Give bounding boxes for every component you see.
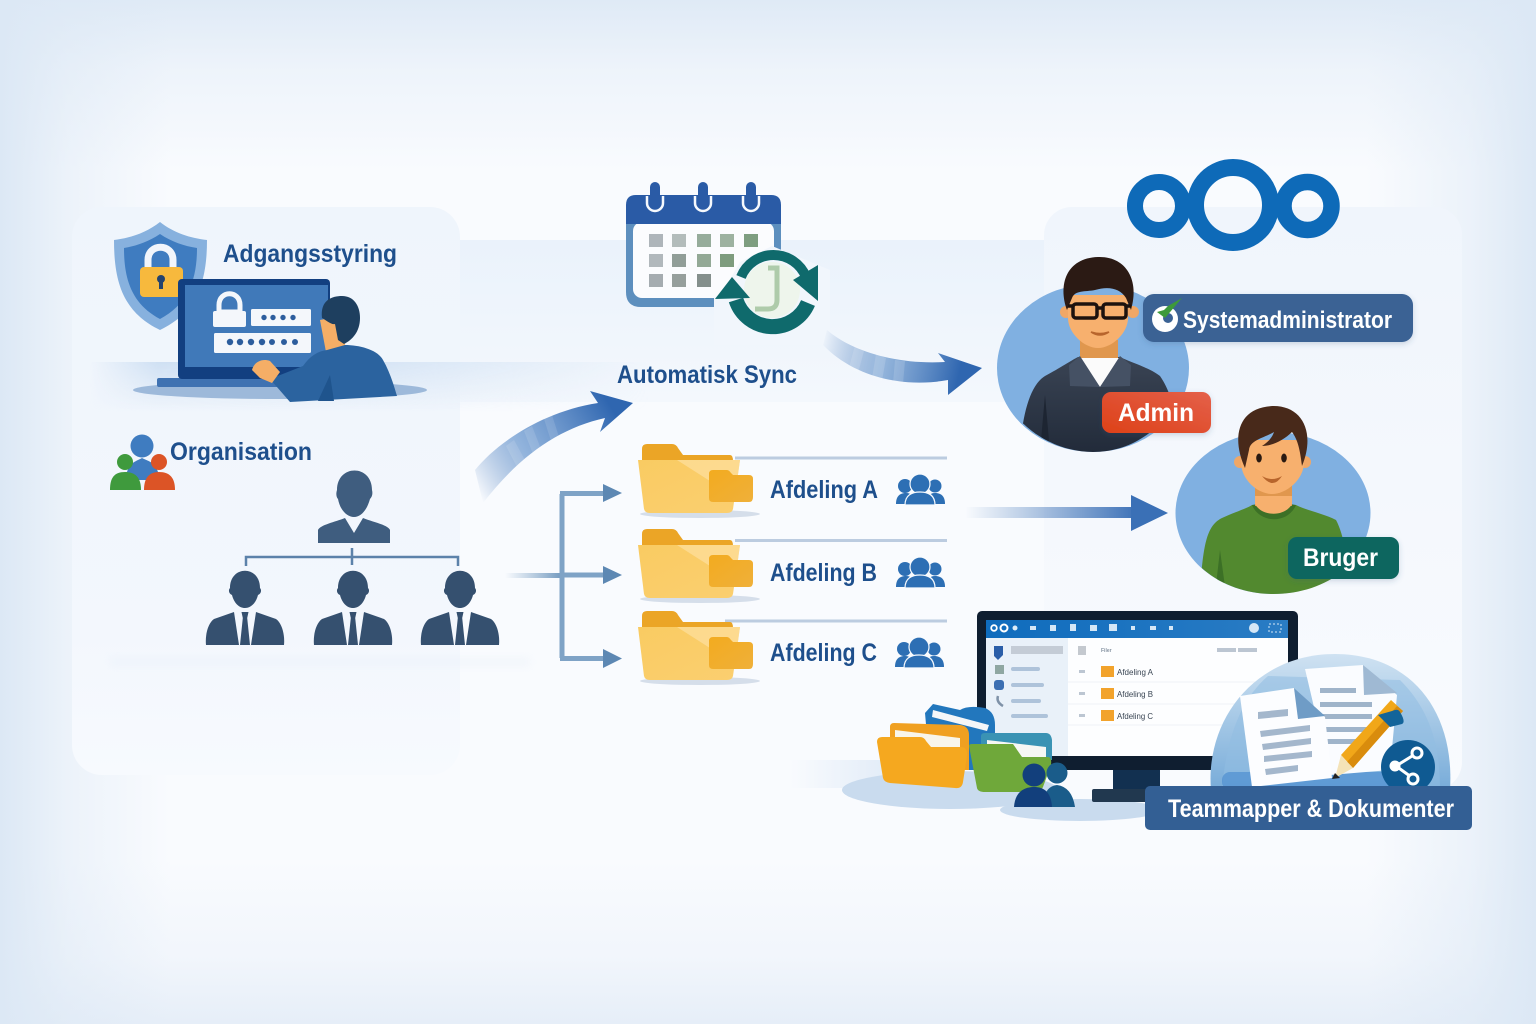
icon: documents circle [1211,654,1450,794]
badge: Teammapper & Dokumenter: Teammapper & Dokumenter [1168,795,1454,823]
heading: Adgangsstyring: Adgangsstyring [223,240,397,268]
app file list: Afdeling C [1117,711,1153,721]
app file list [1068,646,1288,725]
row lines [725,458,947,621]
badge: Systemadministrator: Systemadministrator [1183,307,1392,334]
folder: Afdeling C [638,611,760,685]
panel: users backdrop [1044,207,1462,790]
app file list: Afdeling A [1117,667,1153,677]
document back [1305,665,1397,775]
organisation floor shadow [110,657,530,667]
icon: team B [896,557,945,588]
arrow: sync to admin [823,330,982,395]
app file list: Afdeling B [1117,689,1153,699]
top manager [318,470,390,543]
panel: Automatisk Sync [617,182,830,389]
panel: Adgangsstyring [114,222,427,402]
badge: Teammapper & Dokumenter [1145,786,1472,830]
panel: access and organisation backdrop [72,207,460,775]
badge: Bruger [1288,537,1399,579]
app sidebar [994,646,1063,718]
panel: standard user [1176,406,1399,594]
icon: team people [1014,762,1075,807]
icon: team folders [877,704,1052,792]
desk shadow [133,381,427,399]
label: Afdeling C: Afdeling C [770,639,877,667]
icon: team A [896,474,945,505]
app file list: Filer [1101,648,1112,654]
heading: Organisation: Organisation [170,438,312,466]
org chart connector lines [246,548,458,566]
document front [1240,688,1332,787]
user figure [1200,406,1350,594]
org chart [206,470,499,645]
admin avatar circle [997,284,1189,452]
panel: admin user [997,257,1413,452]
icon: person at laptop [252,296,397,402]
icon: calendar [626,182,781,307]
icon: monitor [977,611,1298,802]
icon: pencil [1332,700,1404,779]
badge: Admin: Admin [1118,399,1194,427]
badge: Bruger: Bruger [1303,544,1378,572]
folder: Afdeling B [638,529,760,603]
desk glow band [106,362,574,400]
employee 2 [314,571,392,645]
icon: laptop with login [157,279,330,387]
admin figure [1020,257,1180,452]
badge: Admin [1102,392,1211,433]
label: Afdeling B: Afdeling B [770,559,877,587]
employee 1 [206,571,284,645]
panel: Organisation [110,434,499,645]
icon: organisation group [110,434,175,490]
folder: Afdeling A [638,444,760,518]
icon: security shield [114,222,207,330]
panel: team folders and documents [790,611,1472,830]
arrow: organisation to departments [505,484,622,668]
icon: check mark [1152,298,1182,332]
panel: departments [638,444,947,685]
app toolbar [986,620,1288,638]
panel: centre band backdrop [460,240,1050,402]
label: Afdeling A: Afdeling A [770,476,878,504]
user avatar circle [1176,432,1370,594]
floor shadow [790,760,1160,821]
arrow: departments to user [965,495,1168,531]
heading: Automatisk Sync: Automatisk Sync [617,361,797,389]
icon: Nextcloud logo [1135,168,1332,242]
arrow: organisation to sync [475,391,633,503]
badge: Systemadministrator [1143,294,1413,342]
icon: share [1381,740,1435,794]
employee 3 [421,571,499,645]
icon: team C [895,637,944,668]
icon: sync arrows [714,246,830,345]
